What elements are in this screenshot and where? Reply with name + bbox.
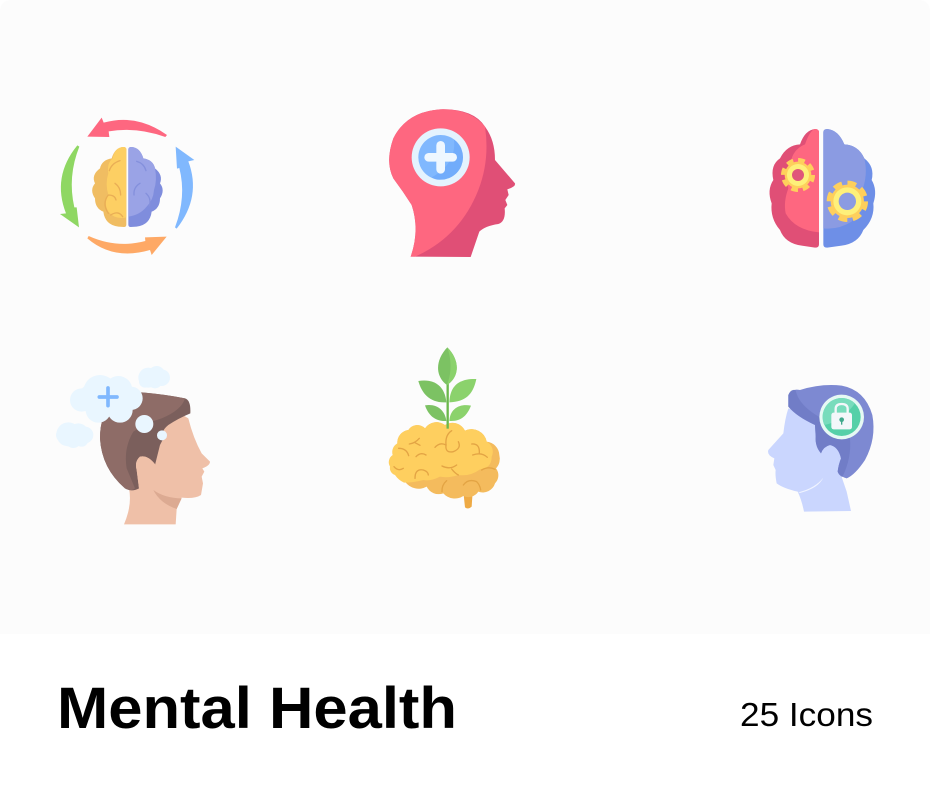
icon: brain with gears	[770, 129, 875, 248]
icon count: 25 Icons	[740, 696, 873, 733]
icon: brain with cycle arrows	[60, 118, 194, 255]
title: Mental Health	[57, 676, 457, 741]
icon: brain with growing plant	[389, 347, 500, 509]
icon: head with padlock	[768, 385, 874, 512]
icon: head with medical cross	[389, 109, 515, 257]
icon: head with thought clouds	[56, 366, 210, 524]
